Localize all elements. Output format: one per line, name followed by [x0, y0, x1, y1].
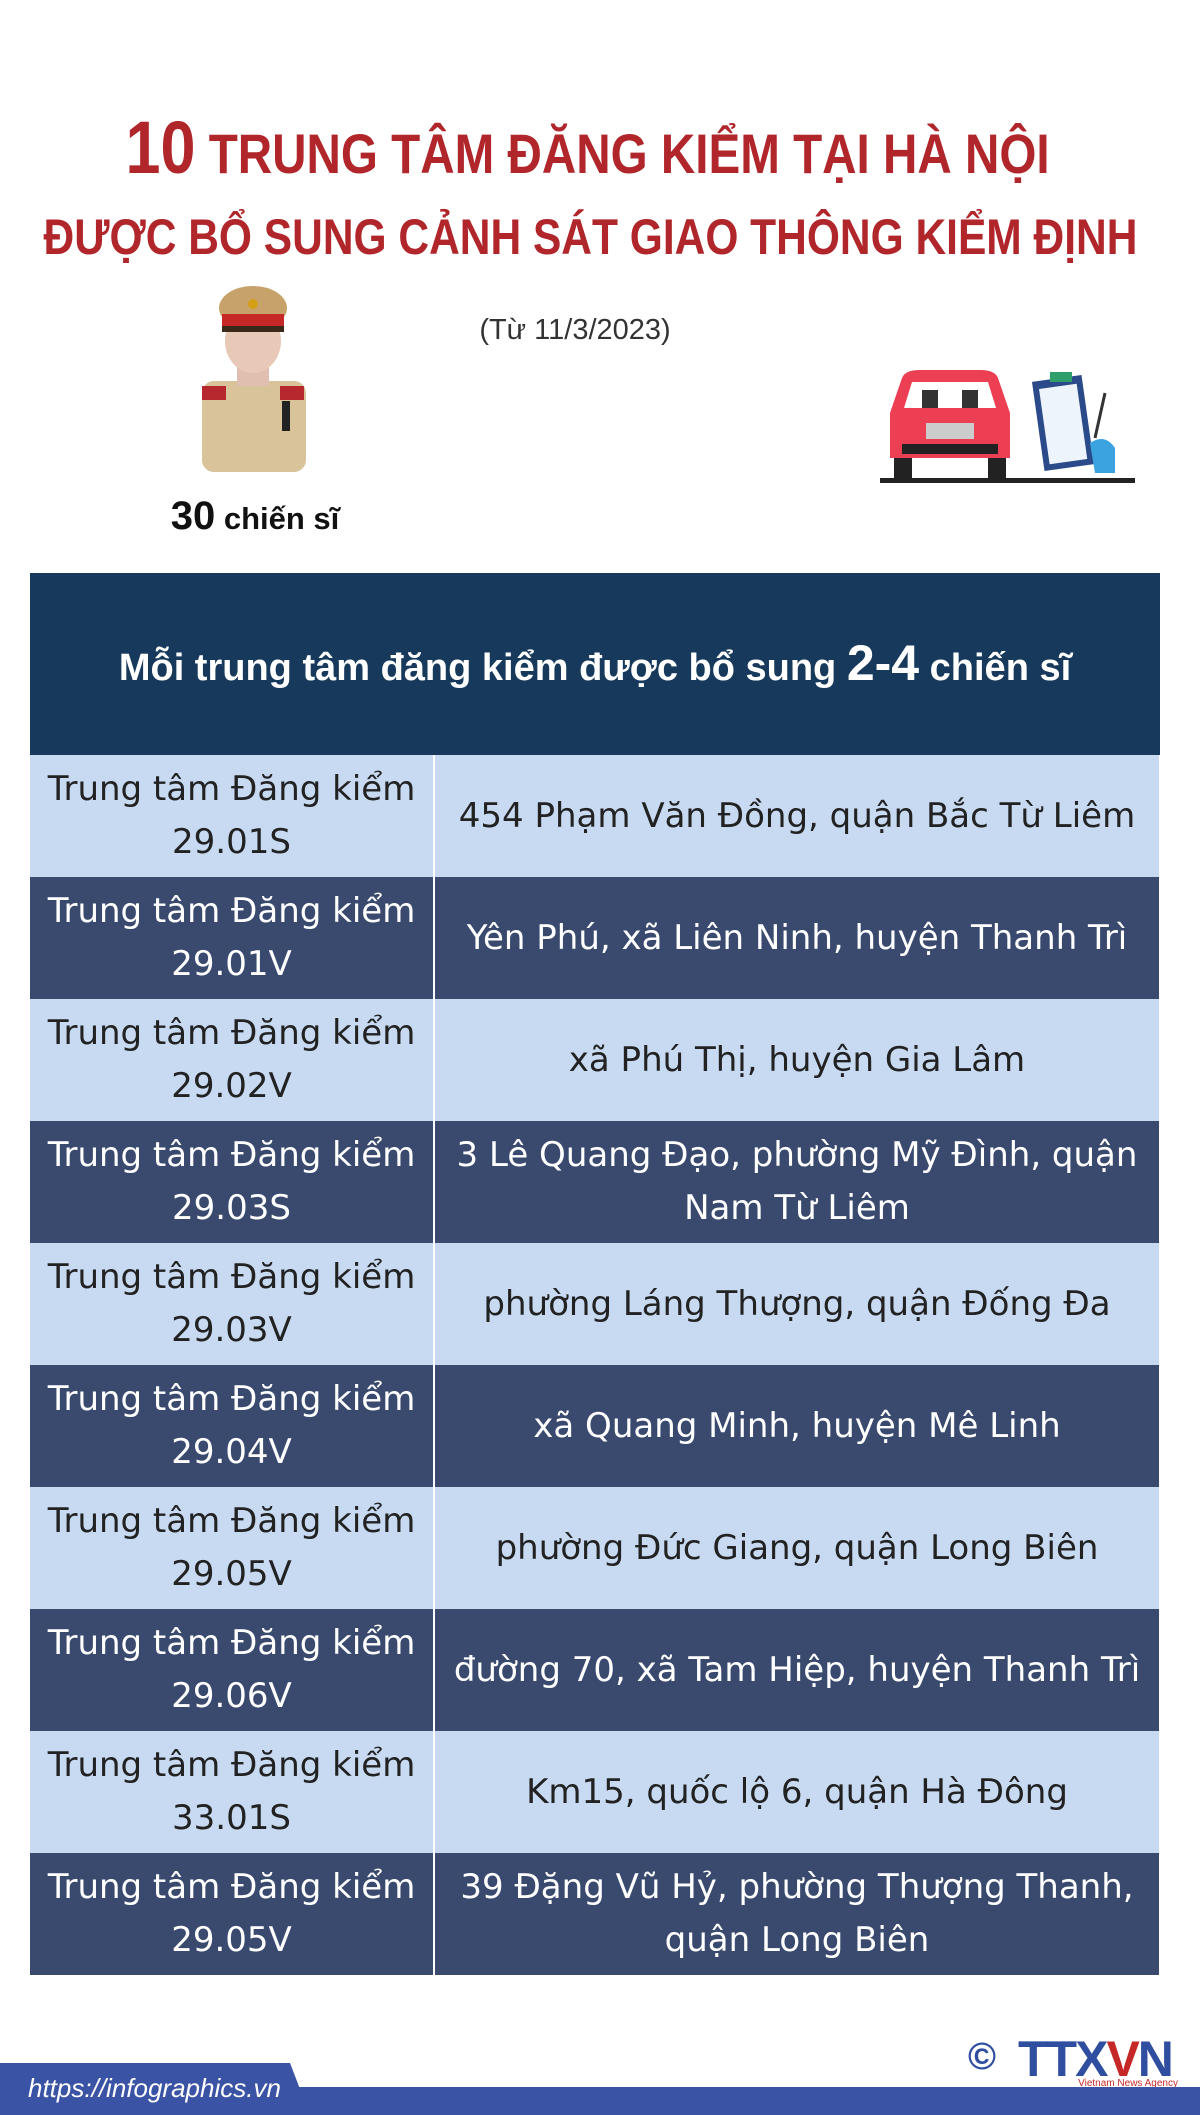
label: 30 chiến sĩ: 30 chiến sĩ — [171, 494, 339, 538]
table header: 29.06V — [171, 1676, 292, 1716]
table header: Trung tâm Đăng kiểm — [48, 769, 415, 809]
table header: 29.01S — [172, 822, 291, 862]
logo: TTXVN: Vietnam News Agency — [1078, 2078, 1178, 2089]
table header: Trung tâm Đăng kiểm — [48, 1745, 415, 1785]
table header: quận Long Biên — [665, 1920, 929, 1960]
table header: Mỗi trung tâm đăng kiểm được bổ sung 2-4 chiến sĩ — [119, 635, 1071, 691]
table header: xã Phú Thị, huyện Gia Lâm — [569, 1040, 1025, 1080]
table header: Nam Từ Liêm — [684, 1188, 910, 1228]
date: (Từ 11/3/2023) — [479, 314, 671, 346]
footer url tab: https://infographics.vn — [28, 2073, 281, 2103]
table header: 29.03S — [172, 1188, 291, 1228]
table header: Trung tâm Đăng kiểm — [48, 1379, 415, 1419]
table header: Trung tâm Đăng kiểm — [48, 1257, 415, 1297]
table header — [30, 573, 1160, 1975]
table header: Trung tâm Đăng kiểm — [48, 891, 415, 931]
footer band — [0, 2087, 1200, 2115]
table header: 29.03V — [171, 1310, 292, 1350]
logo: TTXVN: © — [968, 2036, 996, 2078]
footer url tab — [0, 2063, 300, 2102]
table header: 29.05V — [171, 1554, 292, 1594]
table header: đường 70, xã Tam Hiệp, huyện Thanh Trì — [454, 1650, 1140, 1690]
table header: 29.04V — [171, 1432, 292, 1472]
table header: Trung tâm Đăng kiểm — [48, 1867, 415, 1907]
title line 2: ĐƯỢC BỔ SUNG CẢNH SÁT GIAO THÔNG KIỂM ĐỊNH — [43, 209, 1137, 265]
table header: phường Láng Thượng, quận Đống Đa — [483, 1284, 1111, 1324]
table header: 33.01S — [172, 1798, 291, 1838]
table header: Yên Phú, xã Liên Ninh, huyện Thanh Trì — [467, 918, 1127, 958]
table header: Trung tâm Đăng kiểm — [48, 1501, 415, 1541]
table header: Trung tâm Đăng kiểm — [48, 1135, 415, 1175]
table header: xã Quang Minh, huyện Mê Linh — [533, 1406, 1061, 1446]
title line 1: 10 TRUNG TÂM ĐĂNG KIỂM TẠI HÀ NỘI — [126, 106, 1050, 189]
table header: 29.01V — [171, 944, 292, 984]
table header: phường Đức Giang, quận Long Biên — [496, 1528, 1098, 1568]
table: 10 inspection centers — [30, 573, 1160, 1975]
table header: 29.02V — [171, 1066, 292, 1106]
table header: 39 Đặng Vũ Hỷ, phường Thượng Thanh, — [460, 1867, 1134, 1907]
table header: Trung tâm Đăng kiểm — [48, 1623, 415, 1663]
table header: Trung tâm Đăng kiểm — [48, 1013, 415, 1053]
table header: 3 Lê Quang Đạo, phường Mỹ Đình, quận — [457, 1135, 1137, 1175]
logo: TTXVN: TTXVN — [1018, 2031, 1172, 2087]
table header: 29.05V — [171, 1920, 292, 1960]
table header: Km15, quốc lộ 6, quận Hà Đông — [526, 1772, 1068, 1812]
icon: police officer — [202, 286, 306, 472]
table header: 454 Phạm Văn Đồng, quận Bắc Từ Liêm — [459, 796, 1135, 836]
icon: car and clipboard — [880, 370, 1135, 483]
